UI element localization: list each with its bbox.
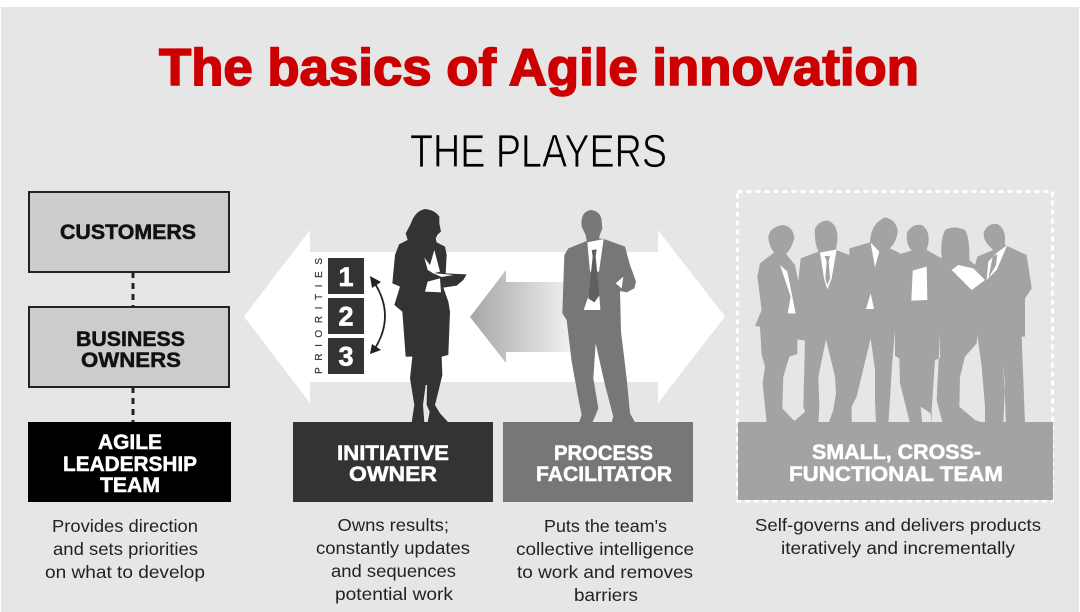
- text: process facilitator description: [516, 516, 694, 605]
- box: business owners: [29, 307, 229, 387]
- text: agile leadership team description: Provides direction: [52, 516, 198, 536]
- connector: dashed lines: [132, 272, 134, 422]
- text: initiative owner description: constantly updates: [316, 538, 470, 558]
- label bar: process facilitator: FACILITATOR: [536, 463, 672, 486]
- text: agile leadership team description: on what to develop: [45, 562, 205, 582]
- label bar: process facilitator: [503, 422, 693, 502]
- label bar: small cross-functional team: SMALL, CROSS-: [812, 441, 981, 464]
- text: process facilitator description: collective intelligence: [516, 539, 694, 559]
- box: customers: [29, 192, 229, 272]
- priority 1: 1: [338, 262, 354, 292]
- subtitle: the players: THE PLAYERS: [410, 125, 667, 177]
- label: priorities: PRIORITIES: [314, 258, 325, 374]
- text: initiative owner description: Owns results;: [338, 515, 449, 535]
- icon: woman silhouette (initiative owner): [392, 209, 467, 422]
- panel: small cross-functional team: [738, 192, 1053, 501]
- box: customers: CUSTOMERS: [60, 221, 196, 244]
- title: The basics of Agile innovation: [159, 39, 919, 97]
- text: team description: iteratively and incrementally: [781, 538, 1015, 558]
- icon: team silhouettes: [755, 217, 1032, 423]
- priorities list: [314, 258, 385, 374]
- arrow: gradient arrow: [470, 270, 578, 363]
- box: business owners: BUSINESS: [76, 328, 185, 351]
- arrow: curved reorder arrow: [370, 276, 385, 354]
- priority 2: 2: [338, 302, 354, 332]
- text: initiative owner description: [316, 515, 470, 604]
- box: business owners: OWNERS: [81, 349, 181, 372]
- label bar: initiative owner: [293, 422, 493, 502]
- text: process facilitator description: to work and removes: [517, 562, 693, 582]
- text: initiative owner description: potential work: [335, 584, 453, 604]
- panel: leadership hierarchy: [28, 192, 231, 502]
- label bar: initiative owner: INITIATIVE: [337, 442, 449, 465]
- text: team description: [755, 515, 1041, 558]
- label bar: small cross-functional team: FUNCTIONAL TEAM: [789, 463, 1003, 486]
- label bar: process facilitator: PROCESS: [554, 442, 653, 465]
- text: process facilitator description: barriers: [574, 585, 638, 605]
- label bar: initiative owner: OWNER: [349, 463, 437, 486]
- box: agile leadership team: AGILE: [98, 431, 162, 454]
- box: agile leadership team: TEAM: [100, 474, 160, 497]
- text: process facilitator description: Puts the team's: [544, 516, 667, 536]
- dashed frame: [738, 192, 1052, 501]
- arrow: white double arrow: [244, 230, 725, 403]
- box: agile leadership team: [28, 422, 231, 502]
- text: agile leadership team description: [45, 516, 205, 582]
- label bar: small cross-functional team: [738, 422, 1053, 500]
- text: agile leadership team description: and sets priorities: [53, 539, 198, 559]
- icon: man silhouette (process facilitator): [562, 210, 636, 422]
- text: initiative owner description: and sequences: [331, 561, 456, 581]
- priority 3: 3: [338, 342, 354, 372]
- text: team description: Self-governs and delivers products: [755, 515, 1041, 535]
- box: agile leadership team: LEADERSHIP: [63, 453, 197, 476]
